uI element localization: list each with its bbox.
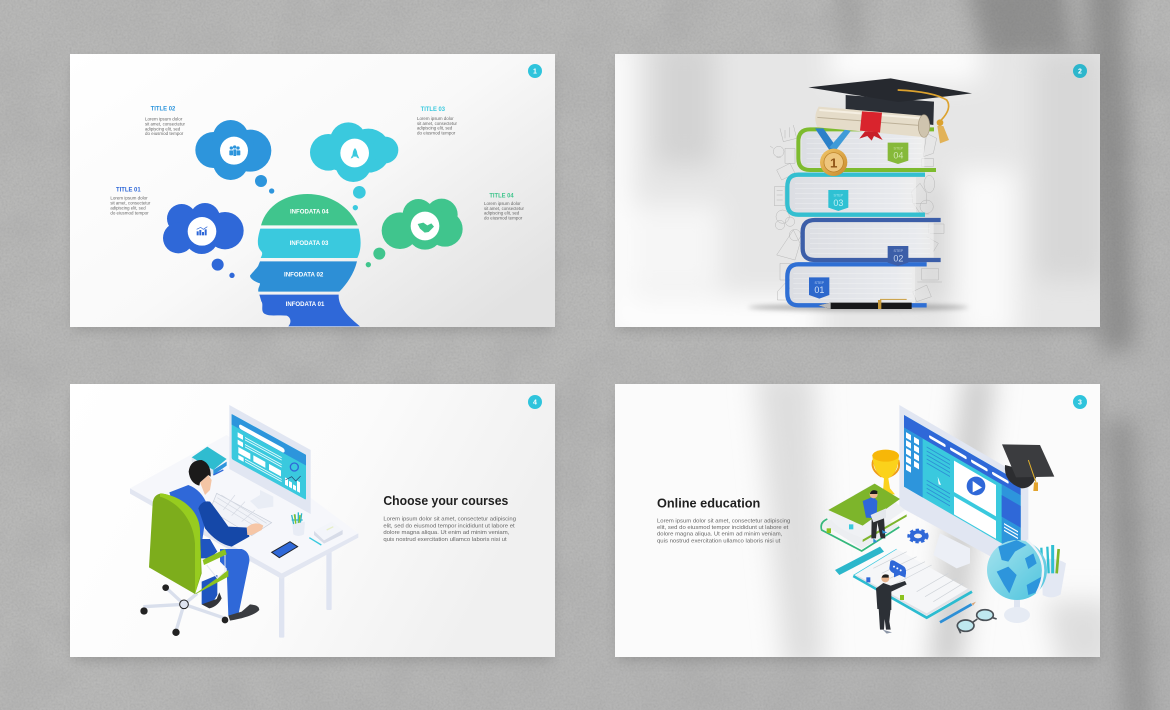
- page number badge 3: [1073, 395, 1087, 409]
- head segment: infodata 03: INFODATA 03: [290, 241, 329, 247]
- text: title 02: [145, 106, 186, 136]
- books on desk: [192, 447, 227, 475]
- medal: 1: [830, 155, 838, 170]
- cloud 01 with chart icon: [163, 203, 244, 254]
- page number badge 4: 4: [533, 400, 537, 406]
- pencil cup: [1041, 545, 1066, 597]
- medal: [815, 128, 851, 176]
- body text: quis nostrud exercitation ullamco laboris nisi ut: [383, 537, 507, 543]
- cloud 02 with people icon: [195, 120, 271, 180]
- text: title 04: sit amet, consectetur: [484, 206, 525, 211]
- notepad and pen: [309, 522, 343, 545]
- book 04: 04: [893, 151, 903, 161]
- book 02: 02: [893, 253, 903, 263]
- text: title 04: Lorem ipsum dolor: [484, 201, 521, 206]
- head segment: infodata 01: INFODATA 01: [286, 302, 325, 308]
- text: title 03: adipiscing elit, sed: [417, 126, 453, 131]
- cloud 04 with handshake icon: [382, 199, 463, 250]
- text: title 04: TITLE 04: [489, 193, 514, 199]
- diploma scroll: [815, 107, 930, 141]
- floor shadow: [748, 304, 968, 311]
- stacked books with student: [821, 484, 907, 551]
- body text: elit, sed do eiusmod tempor incididunt ut labore et: [383, 523, 515, 529]
- text: title 02: TITLE 02: [151, 106, 176, 112]
- body text: dolore magna aliqua. Ut enim ad minim veniam,: [383, 530, 510, 536]
- text: title 01: do eiusmod tempor: [110, 210, 149, 215]
- body text: Lorem ipsum dolor sit amet, consectetur adipiscing: [383, 517, 516, 523]
- text: title 02: Lorem ipsum dolor: [145, 117, 183, 122]
- open book: [853, 549, 972, 618]
- fountain pen: [818, 299, 912, 309]
- heading: Online education: [657, 496, 760, 510]
- panel 1: head infographic: [70, 54, 555, 330]
- body text: elit, sed do eiusmod tempor incididunt ut labore et: [657, 525, 789, 531]
- body text: [657, 518, 790, 544]
- text: title 03: sit amet, consectetur: [417, 121, 458, 126]
- trophy: [872, 450, 899, 494]
- keyboard: [210, 493, 272, 536]
- thought bubbles: [212, 175, 385, 278]
- book 02: [803, 220, 941, 266]
- large monitor: [899, 405, 1028, 577]
- page number badge 1: 1: [533, 68, 537, 76]
- book 01: 01: [814, 285, 824, 295]
- page number badge 4: [528, 395, 542, 409]
- page number badge 1: [528, 64, 542, 78]
- desk: [130, 435, 358, 638]
- text: title 02: adipiscing elit, sed: [145, 126, 181, 131]
- body text: Lorem ipsum dolor sit amet, consectetur adipiscing: [657, 518, 790, 524]
- worker seated at desk: [169, 460, 263, 621]
- body text: [383, 517, 516, 543]
- pencil cup: [292, 512, 305, 536]
- text: title 02: do eiusmod tempor: [145, 131, 184, 136]
- text: title 04: do eiusmod tempor: [484, 216, 523, 221]
- head segment: infodata 01: [259, 295, 360, 326]
- panel 3: online education: [615, 370, 1115, 670]
- text: title 02: sit amet, consectetur: [145, 122, 186, 127]
- desktop monitor: [229, 405, 311, 514]
- head segment: infodata 02: INFODATA 02: [284, 273, 324, 279]
- body text: dolore magna aliqua. Ut enim ad minim veniam,: [657, 532, 783, 538]
- eyeglasses: [957, 610, 997, 633]
- text: title 01: TITLE 01: [116, 187, 141, 193]
- head segment: infodata 02: [250, 261, 357, 292]
- page number badge 2: [1073, 64, 1087, 78]
- heading: Choose your courses: [383, 493, 508, 508]
- text: title 03: [417, 107, 458, 135]
- head segment: infodata 03: [258, 229, 361, 258]
- panel 4: choose your courses: [70, 384, 555, 660]
- smartphone: [272, 542, 298, 558]
- pencil on floor: [940, 602, 976, 622]
- desk globe: [987, 540, 1047, 623]
- text: title 04: adipiscing elit, sed: [484, 211, 520, 216]
- panel 2: stack of books: [614, 54, 1100, 334]
- text: title 01: Lorem ipsum dolor: [110, 196, 148, 201]
- book 04: STEP: [894, 146, 904, 150]
- text: title 01: adipiscing elit, sed: [110, 206, 146, 211]
- page number badge 3: 3: [1078, 400, 1082, 406]
- text: title 03: Lorem ipsum dolor: [417, 116, 454, 121]
- chat bubble: [889, 560, 906, 578]
- graduation cap icon: [1002, 444, 1054, 491]
- book 02: STEP: [894, 249, 904, 253]
- head segment: infodata 04: [261, 194, 358, 225]
- graduation cap: [808, 78, 972, 125]
- text: title 03: TITLE 03: [421, 107, 446, 113]
- page number badge 2: 2: [1078, 68, 1082, 76]
- text: title 04: [484, 193, 525, 221]
- book 04: [798, 129, 936, 170]
- cloud 03 with rocket icon: [310, 122, 398, 182]
- text: title 01: [110, 187, 151, 215]
- book 03: STEP: [834, 193, 844, 197]
- gear icon: [909, 530, 927, 542]
- head segment: infodata 04: INFODATA 04: [290, 210, 329, 216]
- cap tassel: [898, 90, 949, 143]
- teacher figure: [876, 574, 907, 634]
- icon doodles: [770, 125, 944, 302]
- ruler: [835, 547, 884, 575]
- book 01: STEP: [815, 281, 825, 285]
- book 03: [787, 175, 925, 215]
- body text: quis nostrud exercitation ullamco laboris nisi ut: [657, 538, 781, 544]
- office chair: [140, 493, 228, 636]
- book 01: [787, 264, 927, 305]
- text: title 03: do eiusmod tempor: [417, 130, 456, 135]
- book 03: 03: [833, 198, 843, 208]
- text: title 01: sit amet, consectetur: [110, 201, 151, 206]
